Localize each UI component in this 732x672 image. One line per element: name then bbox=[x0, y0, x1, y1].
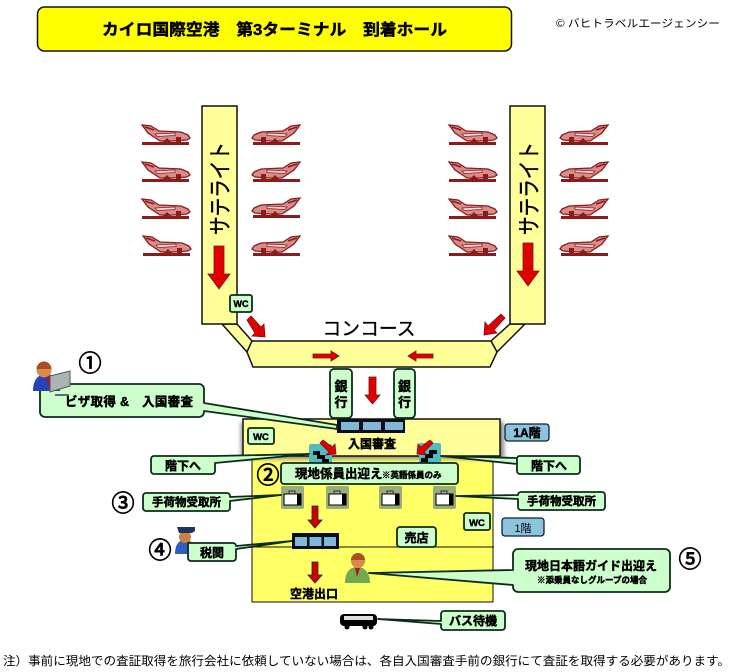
step number 2: ② bbox=[256, 462, 280, 488]
WC 1A floor bbox=[248, 428, 274, 444]
luggage carousels bbox=[281, 486, 456, 509]
step number 4: ④ bbox=[148, 537, 172, 563]
icon: bus bbox=[340, 614, 377, 630]
callout: local staff greeting bbox=[281, 463, 458, 484]
floor tag 1F bbox=[502, 518, 544, 536]
arrow: right satellite bbox=[517, 243, 539, 286]
concourse label: コンコース bbox=[322, 319, 416, 340]
arrow: to exit bbox=[308, 562, 322, 583]
icon: Japanese guide bbox=[345, 553, 370, 583]
callout: bus waiting bbox=[378, 611, 505, 630]
callout: customs: 税関 bbox=[200, 545, 224, 560]
shop: 売店 bbox=[404, 530, 429, 545]
WC upper bbox=[230, 295, 252, 312]
callout: bus waiting: バス待機 bbox=[449, 613, 497, 628]
icon: stairs right bbox=[419, 443, 441, 465]
floor tag 1F: 1階 bbox=[514, 522, 532, 535]
callout: downstairs right: 階下へ bbox=[531, 459, 567, 473]
floor tag 1A: 1A階 bbox=[513, 426, 541, 440]
callout: baggage claim right: 手荷物受取所 bbox=[527, 494, 596, 508]
immigration label: 入国審査 bbox=[348, 436, 396, 451]
callout: Japanese guide greeting bbox=[369, 549, 670, 592]
floor tag 1A bbox=[505, 424, 549, 441]
bank left: 銀 bbox=[334, 379, 348, 394]
bank right bbox=[394, 369, 415, 418]
satellite label left: サテライト bbox=[207, 142, 233, 235]
arrow: to customs bbox=[308, 506, 322, 528]
callout: downstairs left bbox=[151, 454, 309, 474]
callout: visa and immigration: ビザ取得 & 入国審査 bbox=[65, 394, 193, 409]
title banner bbox=[38, 7, 512, 51]
callout: visa and immigration bbox=[40, 384, 337, 429]
callout: baggage claim left: 手荷物受取所 bbox=[152, 495, 221, 509]
callout: downstairs left: 階下へ bbox=[165, 459, 201, 473]
callout: Japanese guide greeting: 現地日本語ガイド出迎え bbox=[525, 558, 657, 573]
concourse arrows bbox=[247, 314, 505, 404]
bank left: 行 bbox=[334, 395, 348, 410]
aircraft: left satellite bbox=[142, 125, 300, 256]
step number 5: ⑤ bbox=[678, 546, 702, 572]
satellite label right: サテライト bbox=[516, 142, 542, 235]
WC 1A floor: WC bbox=[253, 432, 269, 443]
callout: Japanese guide greeting: ※添乗員なしグループの場合 bbox=[537, 575, 647, 585]
callout: customs bbox=[188, 541, 292, 561]
arrows to stairs bbox=[320, 440, 433, 455]
WC 1F: WC bbox=[469, 518, 485, 529]
callout: baggage claim left bbox=[143, 493, 281, 511]
aircraft: right satellite bbox=[449, 125, 608, 256]
airport exit label: 空港出口 bbox=[290, 586, 338, 601]
footnote: 注）事前に現地での査証取得を旅行会社に依頼していない場合は、各自入国審査手前の銀行にて査証を取得する必要があります。 bbox=[3, 653, 730, 668]
icon: stairs left bbox=[309, 444, 332, 467]
step number 3: ③ bbox=[112, 490, 134, 516]
bank right: 行 bbox=[398, 395, 411, 410]
callout: baggage claim right bbox=[456, 492, 605, 510]
step number 1: ① bbox=[78, 350, 102, 376]
WC upper: WC bbox=[234, 299, 249, 309]
shop bbox=[397, 527, 436, 547]
callout: local staff greeting: ※英語係員のみ bbox=[382, 470, 442, 480]
concourse building bbox=[202, 106, 545, 367]
customs counter bbox=[292, 533, 339, 549]
callout: downstairs right bbox=[441, 456, 580, 474]
1A floor shadow bbox=[241, 422, 504, 459]
1F arrival hall bbox=[252, 456, 494, 602]
immigration counter bbox=[337, 419, 405, 433]
icon: customs officer bbox=[175, 527, 196, 554]
1A floor immigration hall bbox=[243, 419, 500, 456]
callout: local staff greeting: 現地係員出迎え bbox=[295, 466, 383, 481]
icon: immigration officer at computer bbox=[33, 362, 70, 396]
bank left bbox=[330, 369, 352, 418]
bank right: 銀 bbox=[398, 379, 411, 394]
arrow: left satellite bbox=[208, 246, 230, 289]
title banner: カイロ国際空港 第3ターミナル 到着ホール bbox=[102, 20, 447, 39]
copyright: © バヒトラベルエージェンシー bbox=[556, 17, 720, 30]
WC 1F bbox=[464, 513, 490, 530]
